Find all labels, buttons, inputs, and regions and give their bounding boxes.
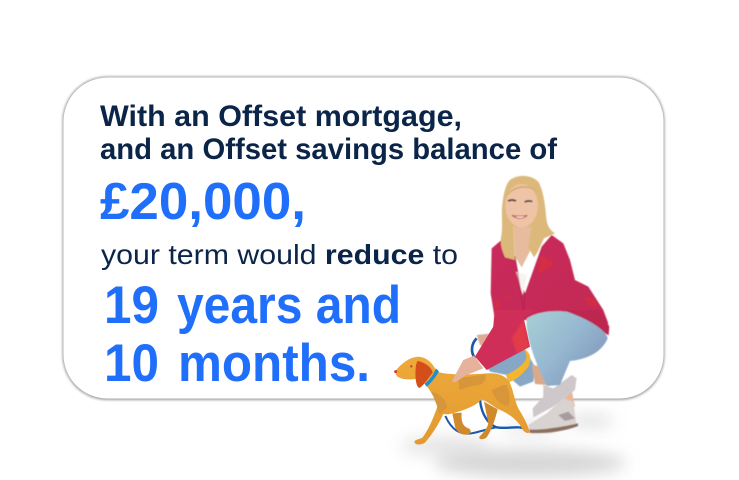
result: new mortgage term [104,276,401,393]
red sleeve highlight [512,320,529,353]
result: new mortgage term: 10 [104,334,159,393]
icon: illustrated dog [394,349,530,445]
dog collar [425,368,439,387]
leash [445,338,525,434]
person: woman crouching [477,176,609,433]
upper hand [477,333,498,348]
result: new mortgage term: years and [177,276,401,335]
ankle [532,365,547,385]
heading: offset mortgage intro: and an Offset savings balance of [100,133,558,166]
smile [512,215,527,218]
result: new mortgage term: months. [178,334,370,393]
cardigan [491,235,608,323]
cardigan button band [515,257,525,320]
cardigan red patches [494,255,600,309]
woman's front arm and hand [452,310,537,382]
rear leg jeans [487,347,535,387]
panel: white rounded card [62,76,664,400]
dog eye [410,365,412,367]
dog tail [506,349,530,382]
front jeans [526,311,608,386]
dog patches [458,374,486,390]
neck and chest [513,225,532,267]
dog body [395,357,530,445]
right cardigan hem [560,310,609,335]
hand on dog [452,356,483,382]
heading: offset mortgage intro [100,100,558,166]
dog legs [452,413,471,435]
dog ear [415,361,433,388]
dog nose [394,370,397,373]
white top [516,272,527,295]
hair [501,176,555,260]
savings amount: £20,000, [100,173,306,231]
text: term reduction: your term would reduce to [101,239,458,270]
back sleeve [493,310,537,340]
heading: offset mortgage intro: With an Offset mortgage, [100,100,462,133]
woman's upper body [491,176,608,323]
eyes [508,200,532,202]
result: new mortgage term: 19 [104,276,159,335]
face [505,184,538,227]
sleeve [475,310,537,370]
front sneaker [528,398,578,433]
back sneaker [533,375,577,417]
floor shadow [400,415,626,477]
